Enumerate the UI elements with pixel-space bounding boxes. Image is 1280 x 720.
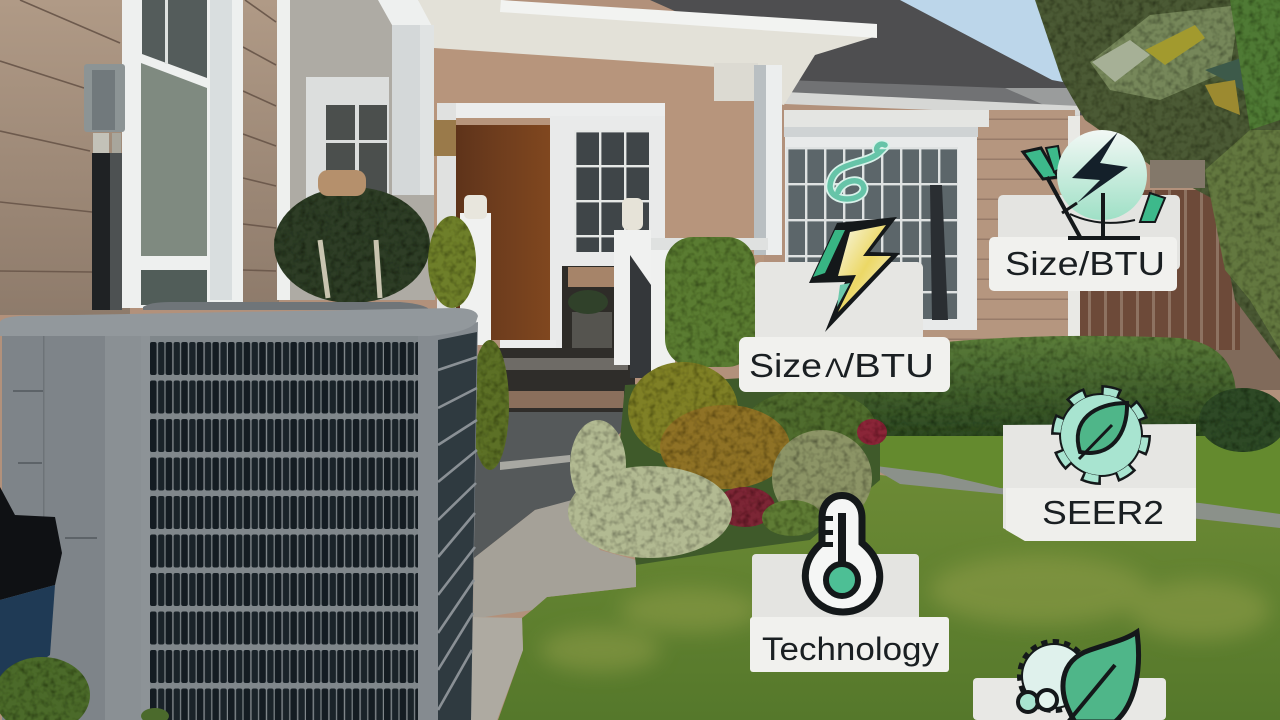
lawn light patches [540, 555, 1270, 672]
condenser: corner post [105, 335, 141, 720]
background: sky [880, 0, 1100, 100]
card backing [1003, 424, 1196, 541]
palm foliage [1035, 0, 1280, 360]
icon: swirl [830, 144, 885, 199]
house: porch interior [290, 0, 435, 300]
house: right window [784, 110, 989, 330]
card: bottom with gear and leaf [973, 632, 1166, 720]
card: Size/BTU with lightning bolt [739, 144, 950, 392]
icon: lightning bolt [809, 217, 900, 332]
porch plants [274, 170, 476, 308]
label: /BTU [843, 347, 934, 384]
card backing [752, 554, 919, 624]
label: SEER2 [1042, 495, 1164, 532]
label: Technology [762, 631, 939, 667]
card: SEER2 with gear leaf [1003, 391, 1196, 541]
house: roof [650, 0, 1095, 116]
white porch railing [460, 195, 768, 378]
house: right siding wall [785, 110, 1075, 342]
label [750, 617, 949, 672]
card: Size/BTU with globe bolt [989, 130, 1180, 291]
card: Technology with thermometer [750, 496, 949, 672]
house: front door and frame [432, 103, 665, 358]
air conditioner condenser unit [0, 302, 478, 720]
shrub behind condenser [471, 340, 509, 470]
house: tan front wall [434, 40, 764, 265]
label [739, 337, 950, 392]
house: porch roof beam and arch [378, 0, 877, 255]
card backing [998, 195, 1180, 270]
condenser: top cap [143, 302, 430, 310]
condenser: front grille [150, 336, 418, 720]
house: left window [122, 0, 243, 308]
dark planter and foreground plant [0, 487, 169, 720]
icon: orb with bolt and leaves [1023, 130, 1165, 238]
card backing [755, 262, 923, 342]
garden hedge and shrubs [568, 237, 1280, 565]
condenser: curved side louvers [415, 322, 478, 720]
house: left siding wall [0, 0, 290, 315]
condenser: cabinet side panel [2, 330, 150, 720]
background: trees and fence [1035, 0, 1280, 390]
label: Size [749, 347, 822, 384]
label: Λ [825, 353, 844, 383]
front walkway and steps [470, 348, 640, 720]
card backing [973, 678, 1166, 720]
icon: gear with leaf [1057, 391, 1145, 479]
utility box and conduit [84, 64, 125, 310]
icon: gear and leaf [1018, 632, 1139, 720]
label [989, 237, 1177, 291]
icon: thermometer [805, 496, 880, 612]
label: Size/BTU [1005, 245, 1165, 282]
lawn [498, 435, 1280, 720]
